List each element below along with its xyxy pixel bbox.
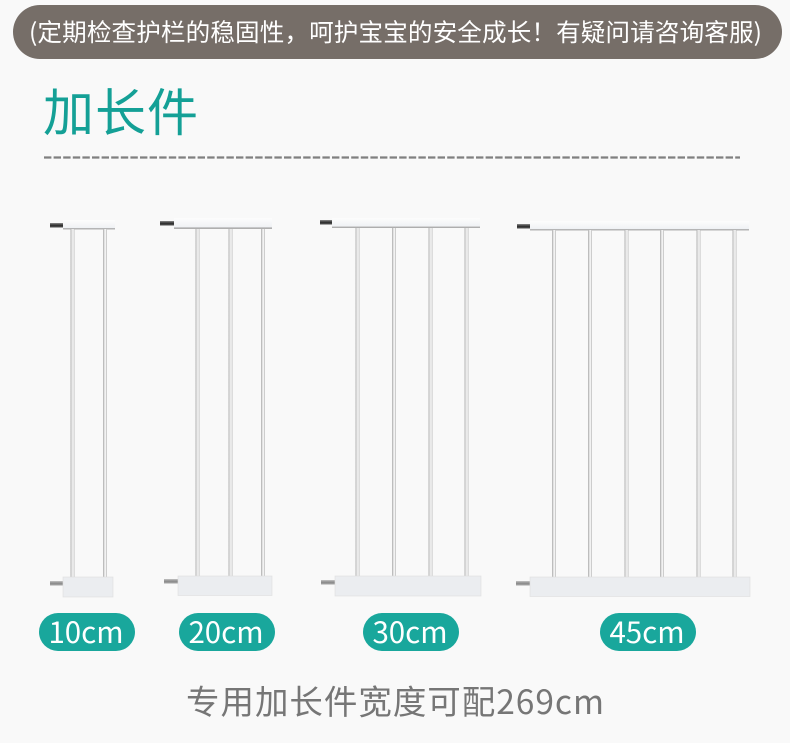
label: 10cm: 10cm — [48, 610, 124, 652]
heading: extension pieces: 加长件 — [43, 72, 198, 146]
label: 20cm: 20cm — [188, 610, 264, 652]
product: 20cm extension — [160, 218, 272, 596]
label: 30cm: 30cm — [372, 610, 448, 652]
product: 45cm extension — [516, 221, 750, 596]
label: 45cm: 45cm — [609, 610, 685, 652]
banner: safety reminder: (定期检查护栏的稳固性，呵护宝宝的安全成长！有疑问请咨询客服) — [29, 13, 762, 49]
product: 10cm extension — [50, 220, 115, 597]
caption: maximum width: 专用加长件宽度可配269cm — [186, 675, 604, 724]
product: 30cm extension — [320, 218, 481, 596]
banner: safety reminder — [13, 5, 782, 59]
